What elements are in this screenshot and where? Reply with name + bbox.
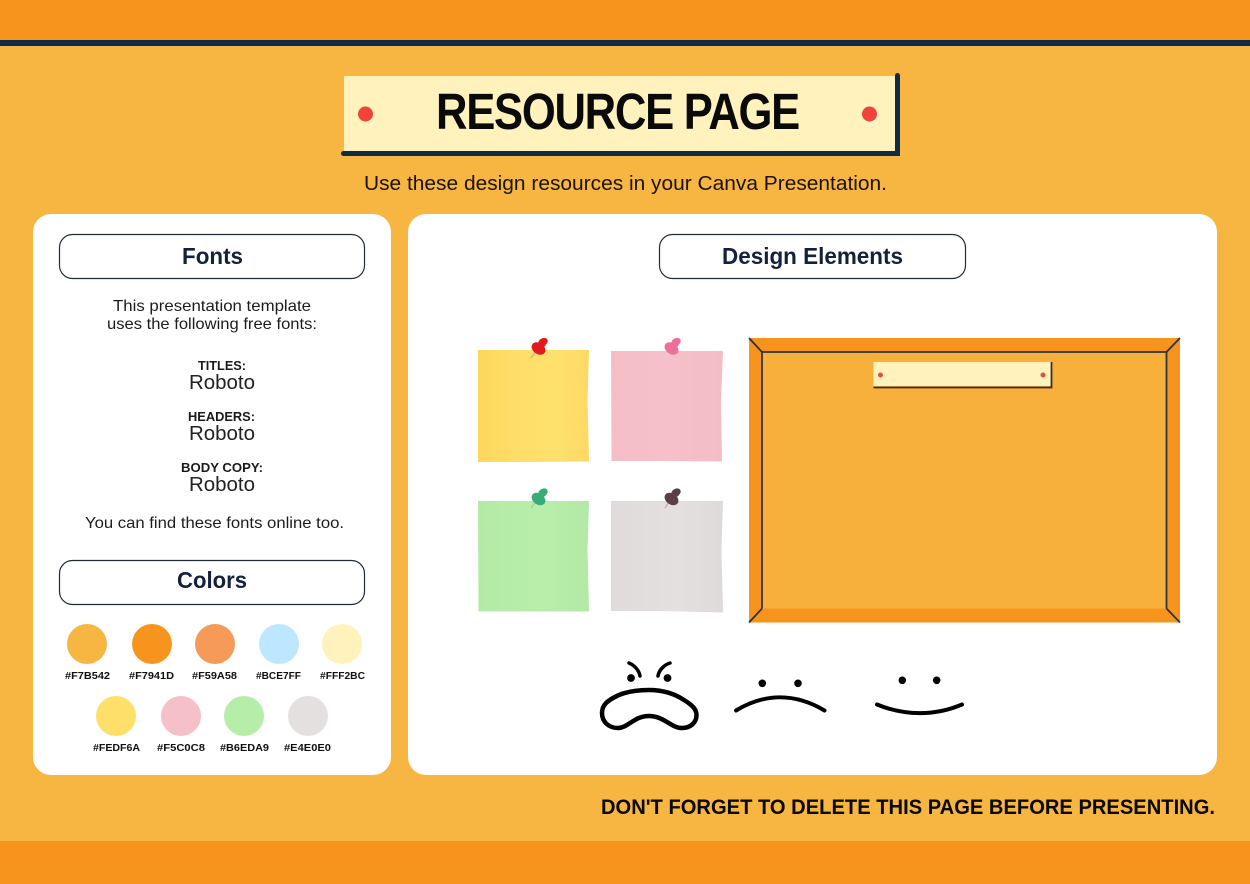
color swatches: #F7941D (129, 670, 174, 682)
frame board (749, 338, 1180, 622)
pin: red (529, 336, 549, 358)
bottom band (0, 841, 1250, 884)
sticky note: gray (611, 487, 723, 612)
color swatches: #FFF2BC (320, 670, 365, 682)
font: headers: Roboto (189, 423, 255, 445)
font: titles (189, 358, 255, 394)
heading: design elements: Design Elements (722, 243, 903, 269)
color swatches: #E4E0E0 (284, 742, 331, 754)
font: body copy: BODY COPY: (181, 460, 263, 475)
pin: green (529, 487, 549, 508)
fonts intro text: This presentation template (113, 298, 311, 315)
color swatches: #B6EDA9 (220, 742, 269, 754)
sticky note: green (478, 487, 589, 612)
top band (0, 0, 1250, 46)
icon: angry face (602, 663, 696, 728)
fonts intro text (107, 298, 317, 333)
board plaque (874, 362, 1052, 388)
heading: fonts: Fonts (182, 243, 243, 269)
font: body copy (181, 460, 263, 496)
font: headers (188, 409, 255, 445)
panel: fonts and colors (33, 214, 391, 775)
icon: neutral smile face (877, 676, 962, 713)
fonts intro text: uses the following free fonts: (107, 316, 317, 333)
font: titles: TITLES: (198, 358, 246, 373)
color swatches (65, 624, 365, 754)
sticky note: yellow (478, 336, 589, 462)
pin: dark (662, 487, 682, 508)
sticky note: pink (611, 336, 723, 462)
fonts note: You can find these fonts online too. (85, 515, 344, 532)
color swatches: #F5C0C8 (157, 742, 205, 754)
heading: colors: Colors (177, 567, 247, 593)
heading: design elements (660, 234, 966, 278)
color swatches: #BCE7FF (256, 670, 302, 682)
icon: sad face (736, 680, 824, 710)
footer reminder: DON'T FORGET TO DELETE THIS PAGE BEFORE PRESENTING. (601, 796, 1215, 819)
subtitle: Use these design resources in your Canva Presentation. (364, 173, 887, 195)
color swatches: #F7B542 (65, 670, 110, 682)
heading: colors (60, 560, 364, 604)
title: RESOURCE PAGE (436, 83, 799, 140)
heading: fonts (60, 234, 364, 278)
font: body copy: Roboto (189, 474, 255, 496)
title plaque (344, 76, 898, 154)
color swatches: #F59A58 (192, 670, 237, 682)
color swatches: #FEDF6A (93, 742, 140, 754)
font: titles: Roboto (189, 372, 255, 394)
pin: pink (662, 336, 682, 358)
panel: design elements (408, 214, 1217, 775)
font: headers: HEADERS: (188, 409, 255, 424)
